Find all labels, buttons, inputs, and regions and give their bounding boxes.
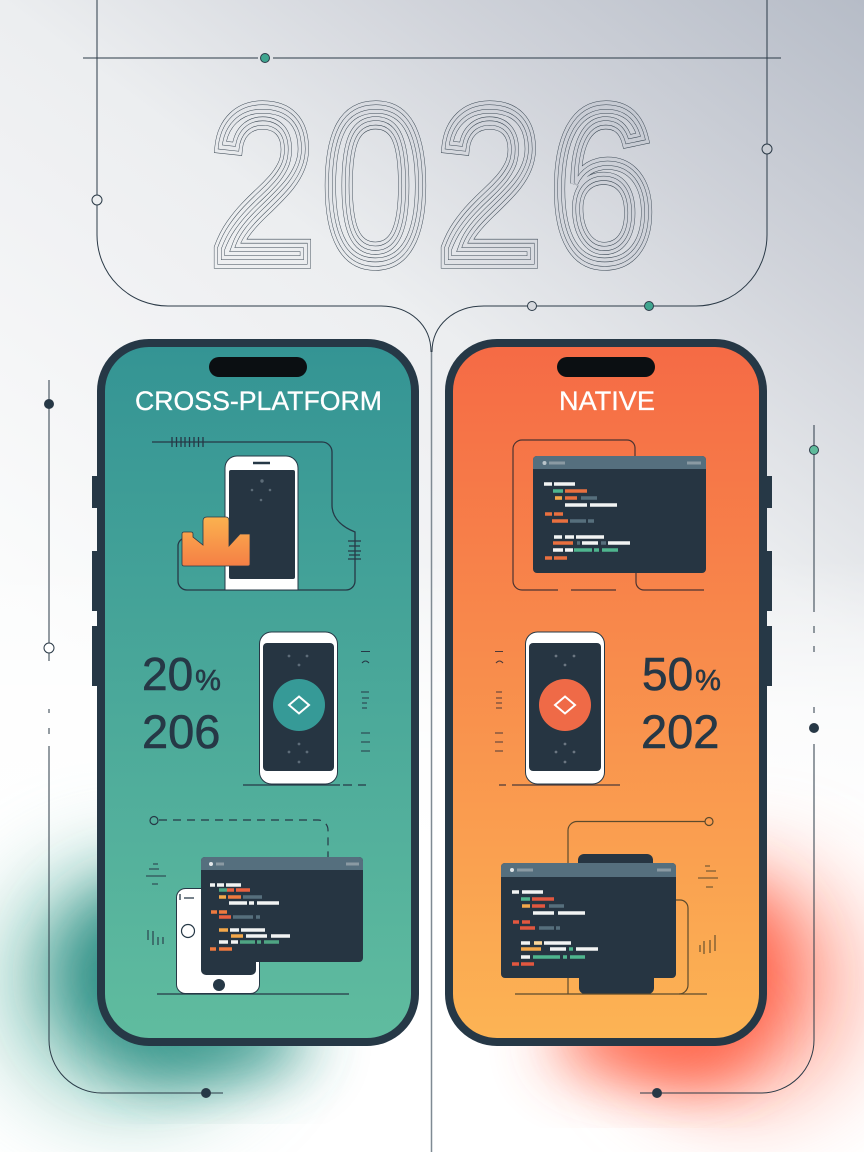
notch	[557, 357, 655, 377]
glow: coral wide	[620, 860, 864, 1110]
stat: 50%: 50%	[642, 648, 721, 700]
stat: 20%: 20%	[142, 648, 221, 700]
glow: teal wide	[0, 855, 270, 1115]
side buttons right	[767, 476, 772, 686]
phone body	[449, 343, 763, 1042]
glow: coral core	[605, 880, 795, 1070]
illustration: code window over phone	[146, 816, 363, 994]
panel: cross-platform phone	[92, 343, 415, 1042]
glow: coral under phone	[550, 1000, 750, 1080]
year title 2026: 2026	[210, 60, 655, 309]
heading: native: NATIVE	[559, 386, 655, 416]
phone body	[101, 343, 415, 1042]
glow: teal core	[55, 885, 245, 1065]
heading: cross-platform: CROSS-PLATFORM	[135, 386, 382, 416]
center divider	[430, 352, 432, 1152]
side buttons left	[92, 476, 97, 686]
year title 2026: 2026	[210, 60, 655, 309]
illustration: phone with diamond	[243, 632, 370, 785]
illustration: phone with app block	[152, 437, 361, 590]
glow: teal under phone	[120, 1002, 310, 1078]
illustration: code window over device	[501, 818, 718, 994]
stat: 206: 206	[142, 705, 220, 758]
year title 2026: 2026	[210, 60, 655, 309]
panel: native phone	[449, 343, 772, 1042]
background fade to white	[0, 560, 864, 860]
illustration: phone with diamond	[495, 632, 620, 785]
illustration: code window with frame	[513, 440, 706, 590]
year title 2026: 2026	[210, 60, 655, 309]
stat: 202: 202	[641, 705, 719, 758]
notch	[209, 357, 307, 377]
